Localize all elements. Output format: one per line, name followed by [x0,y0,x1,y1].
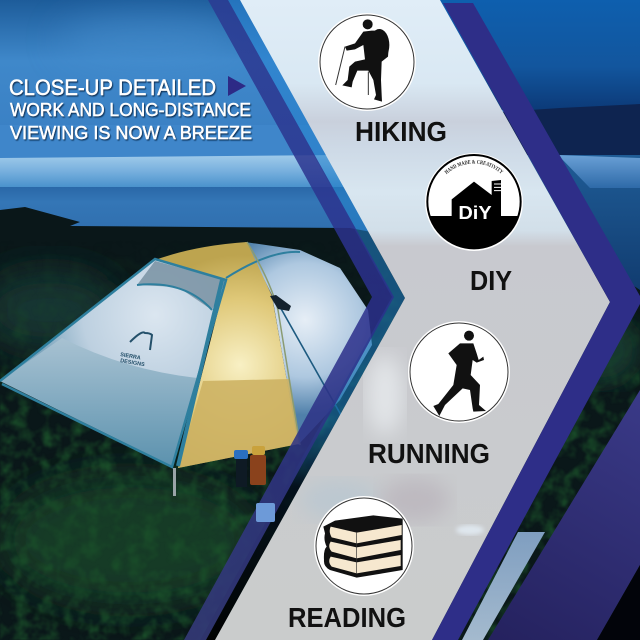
tent stake [173,468,176,496]
translucent indigo chevron band [184,0,394,640]
DIY icon [425,153,523,251]
tent logo: Sierra Designs [120,332,152,368]
label: DIY: DIY [470,265,512,296]
tent yellow fly [50,242,298,468]
photo: tent [0,242,372,496]
cup on ground [256,503,275,522]
light blue accent strip [462,532,545,640]
indigo right chevron band [432,3,640,640]
tent mesh window [137,261,226,310]
tent front lower panel [0,338,197,466]
label: reading: READING [288,602,406,633]
reading icon [314,496,414,596]
tent yellow lower band [178,379,299,468]
icon: headline arrow [228,76,246,96]
headline callout: VIEWING IS NOW A BREEZE [10,123,252,143]
DIY icon: DiY [458,202,492,223]
white chevron panel [215,0,610,640]
headline callout [9,75,252,143]
label: running: RUNNING [368,438,490,469]
lower right dark purple block [488,390,640,640]
headline callout: CLOSE-UP DETAILED [9,75,216,100]
tent toggle [270,295,291,311]
tent grey front panel [0,259,226,466]
hiking icon [318,13,416,111]
headline callout: WORK AND LONG-DISTANCE [10,100,251,120]
label: hiking: HIKING [355,116,447,147]
tent logo: Sierra Designs: DESIGNS [120,358,145,368]
tent right mesh side [245,242,372,445]
running icon [408,321,510,423]
tent teal seams and poles [0,242,341,467]
tent logo: Sierra Designs: SIERRA [120,352,141,362]
DIY icon: HAND MADE & CREATIVITY [444,160,504,174]
translucent blue wash beside panel [200,0,405,640]
water bottles [234,446,266,487]
bottom right black corner [597,565,640,640]
